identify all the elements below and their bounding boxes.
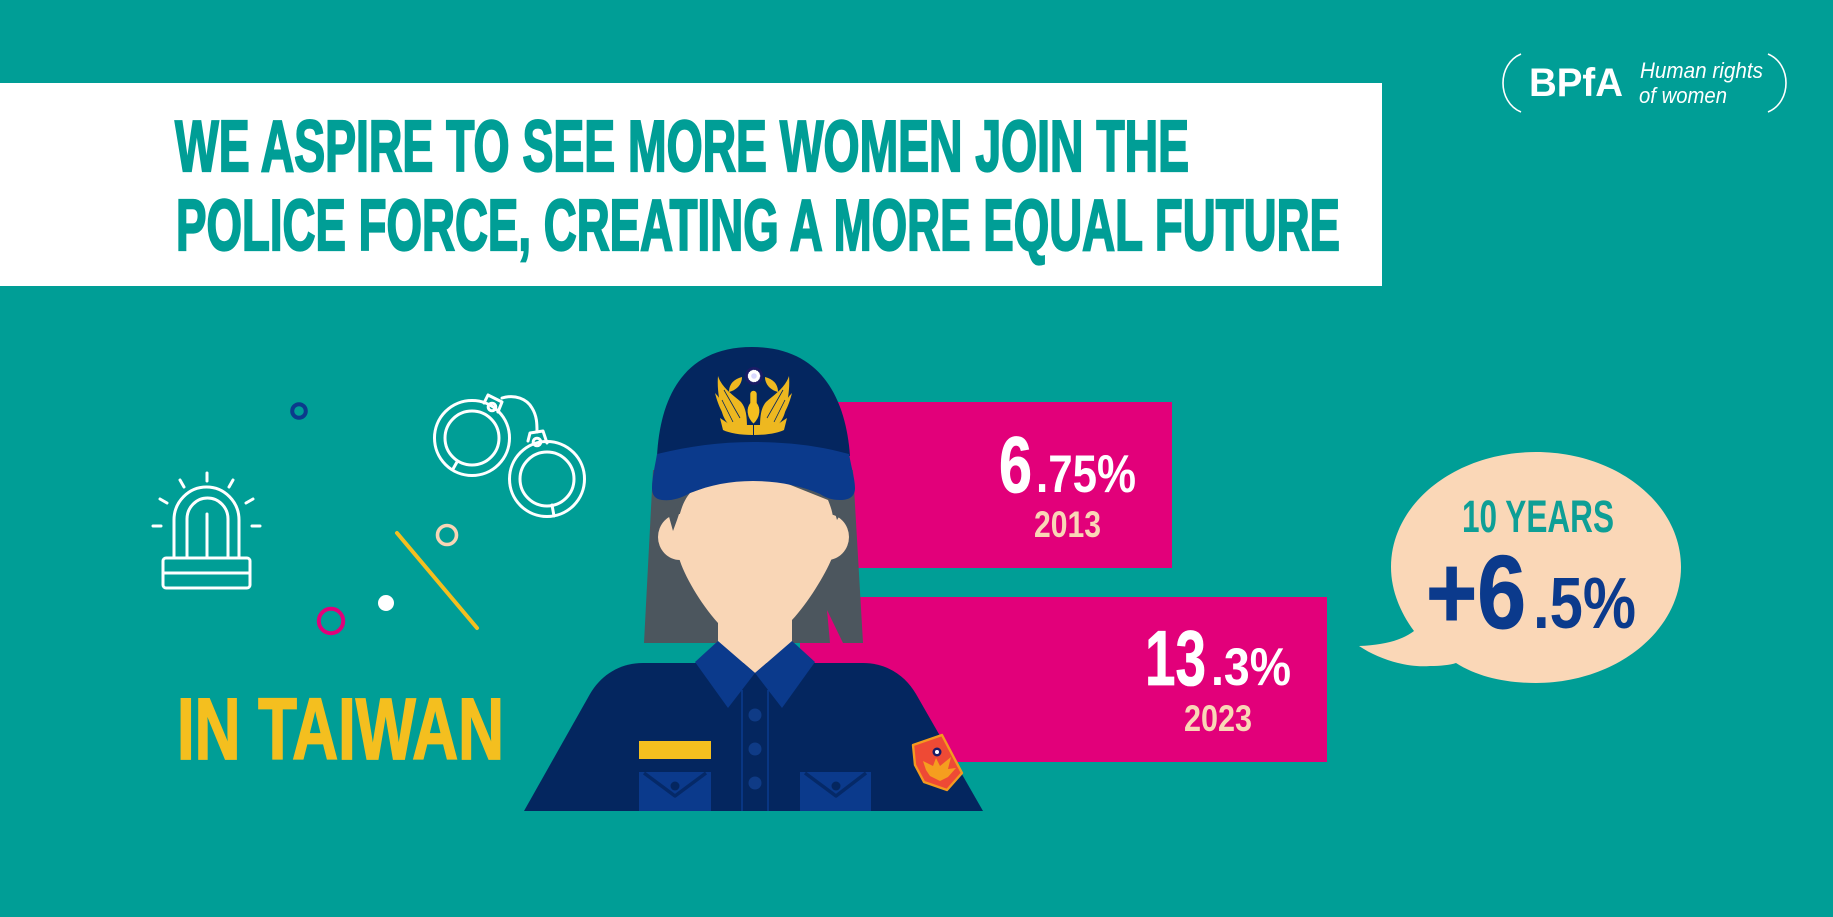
logo: BPfA Human rights of women: of women [1639, 83, 1727, 108]
cap emblem: eagle [715, 367, 792, 435]
police officer figure [524, 347, 983, 811]
icon: handcuffs [434, 395, 584, 516]
speech bubble: 10 years +6.5%: 10 YEARS [1462, 491, 1614, 542]
speech bubble: 10 years +6.5%: +6 [1426, 535, 1526, 651]
location label: IN TAIWAN: IN TAIWAN [177, 681, 504, 778]
bar: 2023: .3% [1211, 638, 1291, 697]
police cap [652, 347, 855, 500]
bar: 2013 [800, 402, 1172, 568]
bar: 2023: 13 [1145, 614, 1206, 702]
logo: BPfA Human rights of women: BPfA [1529, 61, 1623, 105]
title banner [0, 83, 1382, 286]
logo: BPfA Human rights of women [1503, 54, 1786, 112]
collar [695, 641, 815, 708]
face and neck [677, 470, 834, 700]
bar: 2013: 6 [999, 420, 1032, 509]
bar: 2023: 2023 [1184, 698, 1252, 739]
hair [644, 470, 863, 643]
speech bubble: 10 years +6.5% [1359, 452, 1681, 683]
ears [658, 514, 849, 560]
title banner: WE ASPIRE TO SEE MORE WOMEN JOIN THE [175, 107, 1189, 187]
name tag [639, 741, 711, 759]
decorative shapes [292, 404, 477, 633]
sideburns [668, 505, 840, 531]
right pocket [800, 772, 871, 811]
shoulder badge [913, 735, 962, 790]
logo: BPfA Human rights of women: Human rights [1640, 58, 1763, 83]
bar: 2013: 2013 [1034, 504, 1101, 545]
speech bubble: 10 years +6.5%: .5% [1533, 564, 1636, 644]
bar: 2013: .75% [1036, 445, 1136, 504]
bar: 2023 [800, 597, 1327, 762]
icon: siren [153, 473, 260, 588]
neck overlay [718, 620, 792, 673]
uniform shirt [524, 663, 983, 811]
left pocket [639, 772, 711, 811]
shirt placket and buttons [742, 690, 768, 811]
